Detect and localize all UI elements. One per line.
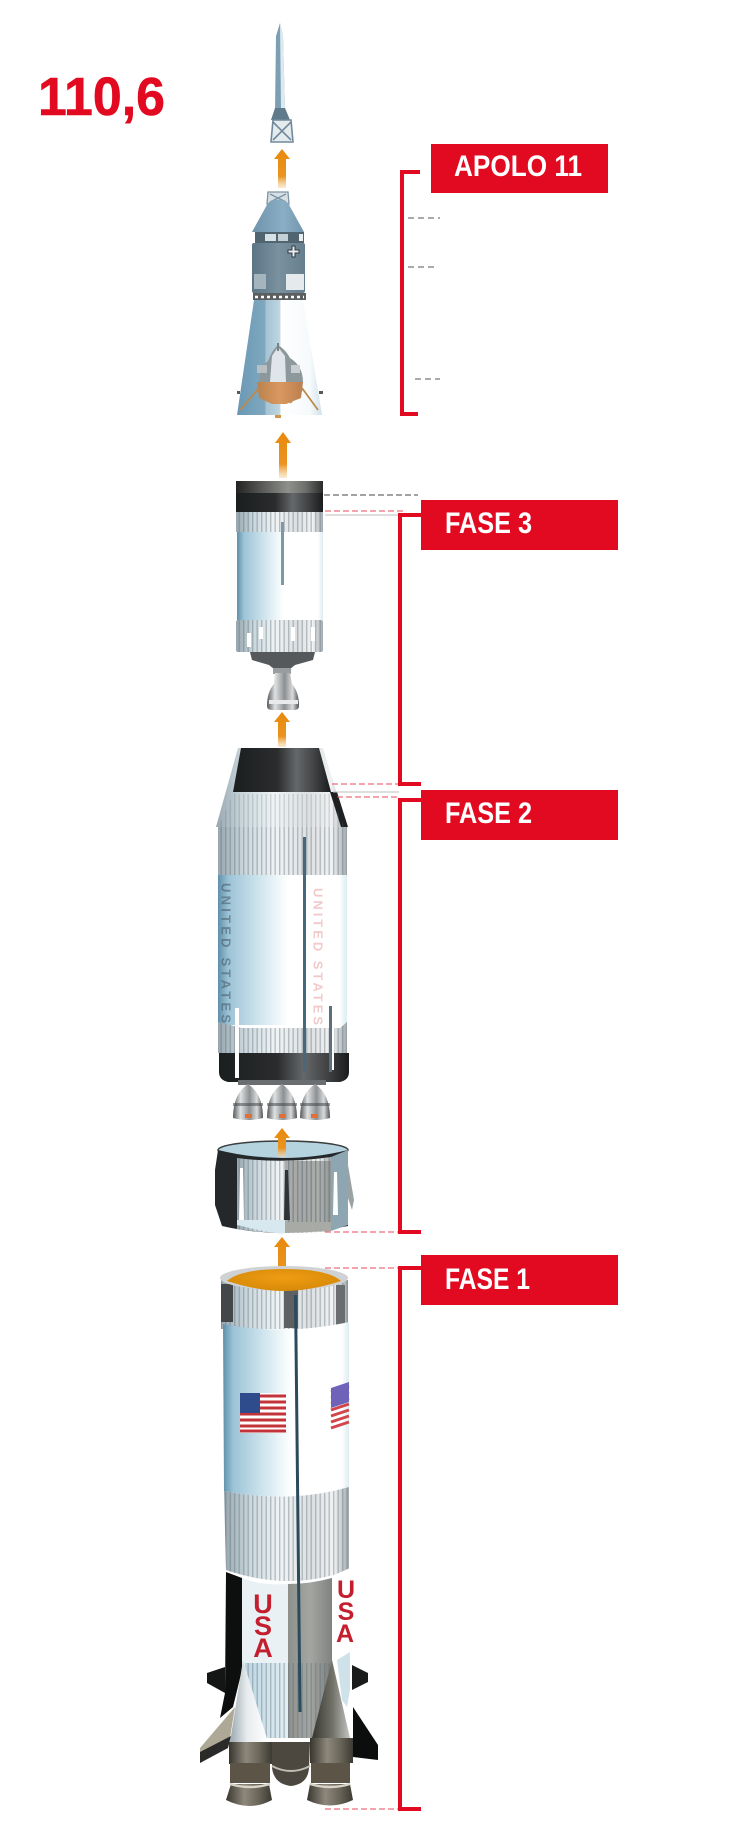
left fairing	[230, 1660, 268, 1742]
label: FASE 1	[421, 1255, 618, 1305]
USA text right: U	[337, 1576, 355, 1604]
arrow 2	[275, 432, 291, 478]
dashed leader lines	[324, 218, 440, 1809]
USA text left: S	[254, 1611, 272, 1641]
adapter ring	[253, 293, 306, 300]
long pipe	[296, 1295, 300, 1712]
lower ribs	[218, 1022, 347, 1053]
arrow 1	[274, 149, 290, 188]
fins	[200, 1572, 378, 1763]
label: FASE 2: FASE 2	[445, 797, 532, 830]
middle engine	[272, 1742, 310, 1786]
label: FASE 1: FASE 1	[445, 1263, 530, 1296]
left engine	[226, 1742, 272, 1806]
interstage	[215, 1141, 354, 1234]
side nubs	[237, 391, 323, 394]
service module thruster cross	[288, 246, 299, 257]
tower ring	[267, 192, 289, 204]
lower ribbed	[245, 1663, 288, 1738]
label: APOLO 11: APOLO 11	[454, 150, 582, 183]
descent stage	[257, 382, 303, 404]
engine J-2	[250, 652, 315, 710]
bracket: Fase 2	[400, 800, 421, 1232]
upper ribbed collar	[221, 1280, 348, 1329]
apollo spacecraft	[237, 192, 323, 418]
right engine	[307, 1738, 353, 1806]
bracket: Fase 3	[400, 515, 421, 784]
right fairing	[312, 1660, 350, 1738]
black base	[219, 1053, 349, 1082]
title: 110,6: 110,6	[38, 67, 165, 127]
side panel	[337, 1652, 350, 1707]
USA text left	[253, 1589, 273, 1663]
engines	[233, 1080, 330, 1120]
lunar module	[240, 343, 318, 410]
ribbed middle	[224, 1487, 349, 1581]
ascent stage	[259, 345, 303, 382]
escape tower	[271, 23, 293, 142]
label: FASE 3: FASE 3	[445, 507, 532, 540]
bracket: Apolo 11	[402, 172, 420, 414]
LM adapter cone	[237, 300, 322, 415]
USA text left: A	[253, 1633, 273, 1663]
USA section	[242, 1578, 288, 1668]
stage 2	[216, 748, 349, 1120]
arrow 5	[274, 1237, 290, 1282]
vertical text: UNITED STATES	[218, 883, 234, 1023]
top opening with orange tank	[220, 1266, 348, 1290]
USA text right: S	[338, 1598, 354, 1626]
arrow 4	[274, 1128, 290, 1157]
stage 1	[200, 1266, 378, 1806]
service module	[252, 243, 305, 293]
arrow 3	[274, 712, 290, 747]
tank body	[218, 875, 347, 1025]
upper cone	[216, 748, 347, 827]
bracket: Fase 1	[400, 1268, 421, 1809]
label: FASE 2	[421, 790, 618, 840]
label: FASE 3	[421, 500, 618, 550]
flag right	[331, 1382, 349, 1428]
label: APOLO 11	[431, 144, 608, 193]
stage 2: UNITED STATES	[310, 888, 326, 1025]
command module cone	[252, 200, 304, 232]
stage 3	[236, 481, 323, 710]
ribbed skirt	[218, 827, 347, 875]
USA text right: A	[336, 1620, 354, 1648]
USA text right	[336, 1576, 355, 1648]
window band	[255, 232, 304, 243]
flag left	[240, 1393, 286, 1433]
legs	[240, 388, 318, 410]
USA text left: U	[253, 1589, 273, 1619]
main tank	[223, 1322, 349, 1497]
